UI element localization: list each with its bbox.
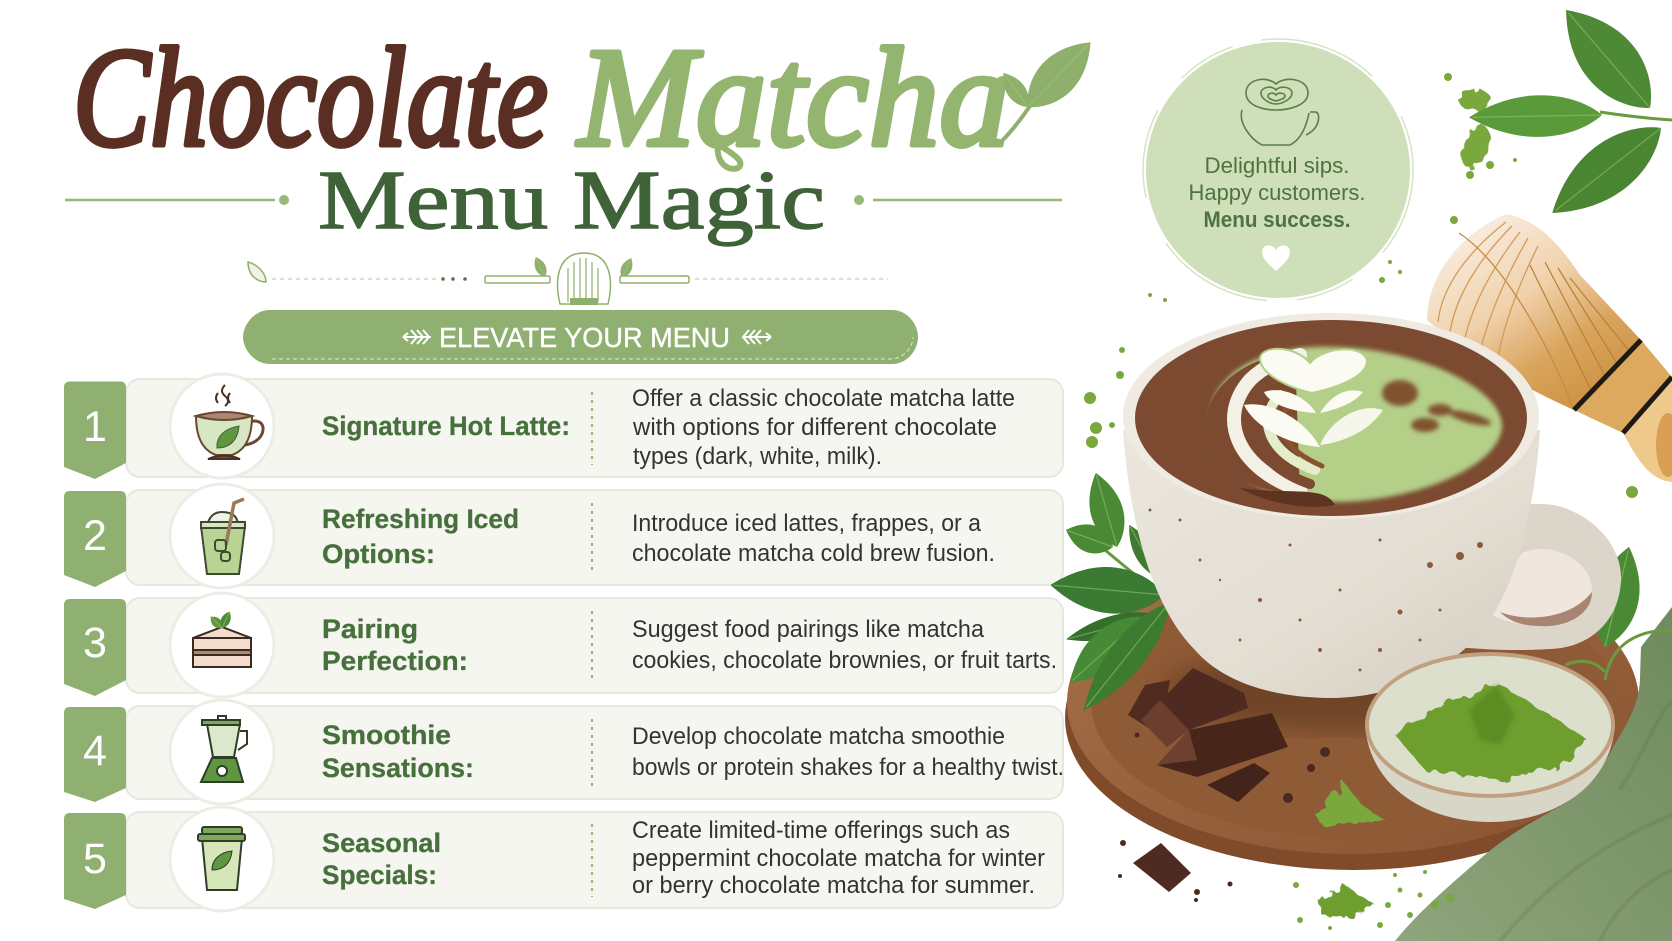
- description 3: cookies, chocolate brownies, or fruit tarts.: [632, 647, 1057, 674]
- banner: Elevate Your Menu: [243, 310, 918, 364]
- photo: right leaf: [1565, 542, 1672, 680]
- label 5: Specials:: [322, 860, 437, 890]
- row 3: Pairing Perfection: [64, 593, 1063, 697]
- label 4: Sensations:: [322, 753, 474, 783]
- icon: banner arrow right: [743, 330, 771, 344]
- row 5: Seasonal Specials: [64, 807, 1063, 911]
- badge 4: [64, 707, 126, 802]
- ornament: whisk divider: [248, 253, 888, 305]
- icon: iced cup: [201, 499, 245, 574]
- row 1: Signature Hot Latte: 1: [83, 403, 107, 451]
- row 2: Refreshing Iced Options: [64, 484, 1063, 588]
- description 2: chocolate matcha cold brew fusion.: [632, 540, 995, 567]
- banner: Elevate Your Menu: ELEVATE YOUR MENU: [439, 322, 730, 353]
- title swash: [712, 140, 740, 169]
- row 5: Seasonal Specials: 5: [83, 835, 107, 883]
- description 1: Offer a classic chocolate matcha latte: [632, 385, 1015, 412]
- photo: leaves left of cup: [1048, 469, 1183, 721]
- label 3: Pairing: [322, 614, 418, 644]
- photo: wooden plate: [1065, 550, 1641, 870]
- description 4: bowls or protein shakes for a healthy twist.: [632, 754, 1064, 781]
- title: Matcha: Matcha: [576, 18, 1010, 176]
- label 4: Smoothie: [322, 720, 451, 750]
- icon: title leaves: [996, 29, 1105, 143]
- label 1: Signature Hot Latte:: [322, 411, 570, 441]
- icon: banner arrow left: [403, 330, 431, 344]
- icon: takeaway cup: [198, 827, 245, 890]
- icon: latte cup outline: [1241, 79, 1319, 145]
- badge 2: [64, 491, 126, 587]
- description 3: Suggest food pairings like matcha: [632, 616, 985, 643]
- cup body: [1123, 430, 1540, 698]
- description 1: types (dark, white, milk).: [633, 443, 882, 470]
- photo: matcha bowl: [1365, 652, 1615, 822]
- badge 3: [64, 599, 126, 696]
- cup handle: [1455, 504, 1621, 650]
- callout text: Delightful sips.: [1204, 153, 1350, 178]
- photo: chocolate pieces: [1128, 668, 1288, 892]
- subtitle: Menu Magic: Menu Magic: [318, 154, 825, 247]
- description 4: Develop chocolate matcha smoothie: [632, 723, 1005, 750]
- description 1: with options for different chocolate: [632, 414, 997, 441]
- badge 1: [64, 382, 126, 479]
- description 5: peppermint chocolate matcha for winter: [632, 845, 1045, 872]
- row 4: Smoothie Sensations: 4: [83, 727, 107, 775]
- label 2: Options:: [322, 539, 435, 569]
- cup speckles: [1148, 508, 1483, 672]
- row 4: Smoothie Sensations: [64, 700, 1064, 804]
- photo: bamboo whisk: [1427, 214, 1672, 482]
- label 3: Perfection:: [322, 646, 468, 676]
- callout circle: Happy customers.: [1188, 180, 1366, 205]
- callout circle: Menu success.: [1204, 207, 1350, 232]
- photo: powder on plate and table: [1293, 782, 1454, 930]
- icon: hot cup: [196, 385, 263, 459]
- coffee: [1135, 320, 1527, 516]
- photo: ceramic cup: [1123, 313, 1621, 698]
- row 3: Pairing Perfection: 3: [83, 619, 107, 667]
- callout circle: [1143, 39, 1413, 301]
- photo: linen cloth: [1395, 607, 1672, 941]
- icon: cake slice: [193, 610, 251, 667]
- label 2: Refreshing Iced: [322, 504, 519, 534]
- latte art: [1205, 347, 1502, 507]
- photo: crumbs: [1118, 732, 1330, 902]
- cup rim: [1123, 313, 1539, 519]
- title: Chocolate: Chocolate: [73, 18, 548, 176]
- row 1: Signature Hot Latte: [64, 374, 1063, 479]
- description 5: Create limited-time offerings such as: [632, 817, 1010, 844]
- photo: powder scatter top: [1084, 73, 1638, 498]
- icon: blender: [201, 716, 247, 782]
- subtitle rules: [65, 195, 1062, 205]
- description 2: Introduce iced lattes, frappes, or a: [632, 510, 982, 537]
- label 5: Seasonal: [322, 828, 441, 858]
- row 2: Refreshing Iced Options: 2: [83, 512, 107, 560]
- description 5: or berry chocolate matcha for summer.: [632, 872, 1035, 899]
- photo: matcha leaves top right: [1469, 0, 1672, 233]
- icon: heart: [1262, 245, 1290, 271]
- badge 5: [64, 813, 126, 909]
